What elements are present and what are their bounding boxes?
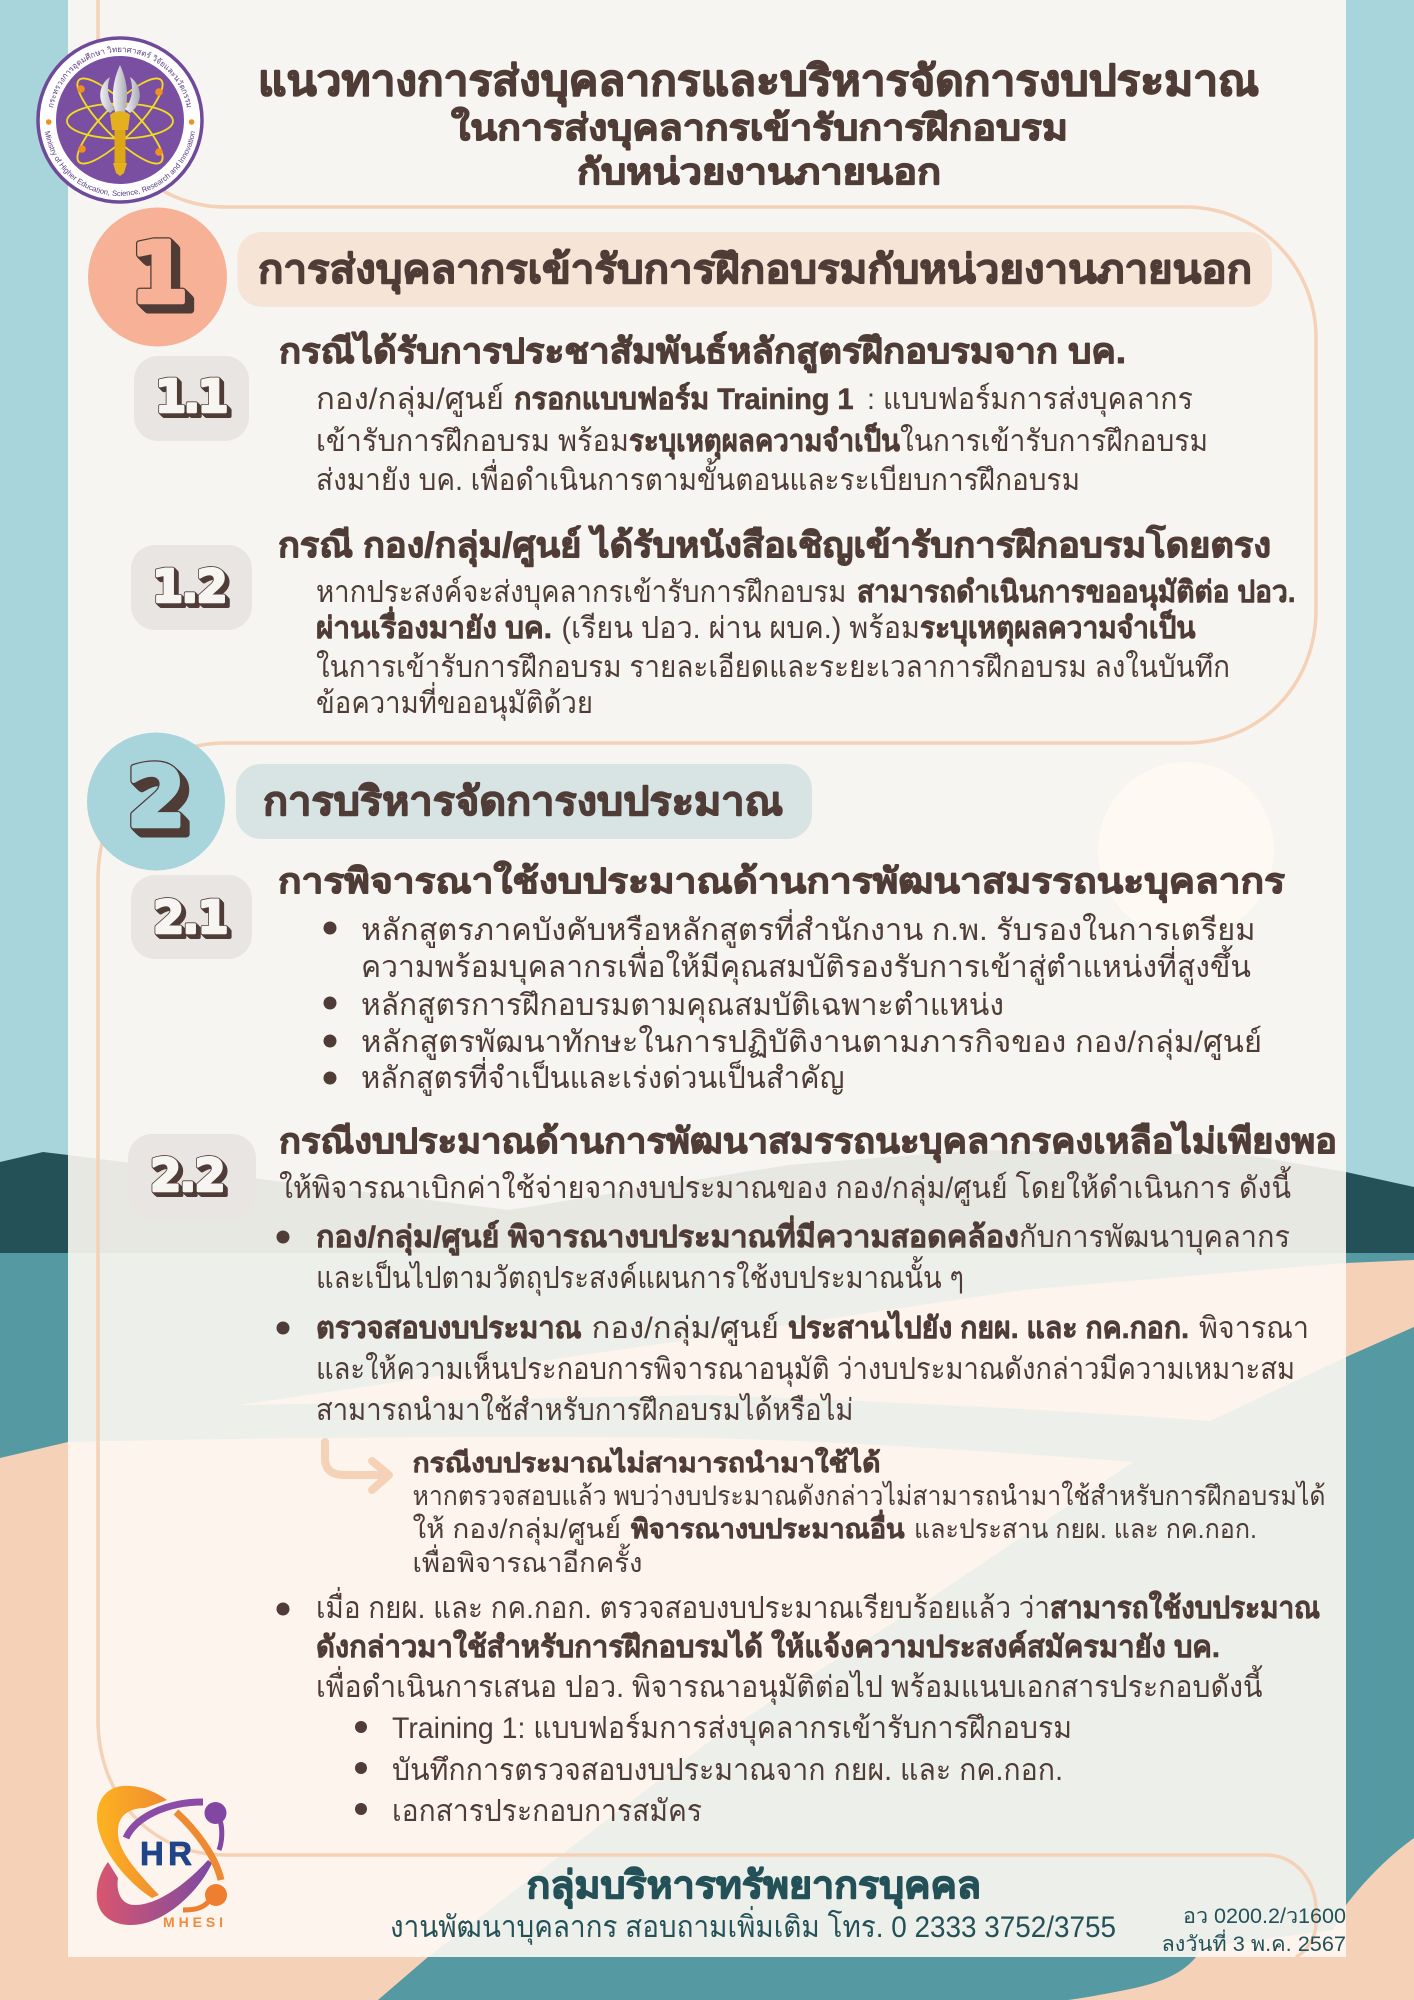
badge 1.1: 1.1	[155, 370, 226, 423]
badge 2.2: 2.2	[150, 1149, 224, 1202]
block 2.2: เพื่อดำเนินการเสนอ ปอว. พิจารณาอนุมัติต่อไป พร้อมแนบเอกสารประกอบดังนี้	[316, 1665, 1262, 1706]
section 2 heading: การบริหารจัดการงบประมาณ	[263, 780, 783, 824]
footer contact: กลุ่มบริหารทรัพยากรบุคคล	[526, 1865, 981, 1909]
block 2.2: และเป็นไปตามวัตถุประสงค์แผนการใช้งบประมาณนั้น ๆ	[316, 1256, 964, 1297]
block 2.2: ตรวจสอบงบประมาณ	[316, 1312, 582, 1345]
logo ring text Thai: กระทรวงการอุดมศึกษา วิทยาศาสตร์ วิจัยและนวัตกรรม	[49, 46, 192, 108]
badge 2.2: 2.2	[150, 1149, 224, 1202]
block 2.1: การพิจารณาใช้งบประมาณด้านการพัฒนาสมรรถนะบุคลากร	[278, 860, 1285, 903]
block 2.1: หลักสูตรการฝึกอบรมตามคุณสมบัติเฉพาะตำแหน่ง	[361, 989, 1004, 1024]
arrow	[325, 1442, 389, 1490]
block 2.2: ประสานไปยัง กยผ. และ กค.กอก.	[788, 1310, 1189, 1345]
block 2.2: เมื่อ กยผ. และ กค.กอก. ตรวจสอบงบประมาณเรียบร้อยแล้ว ว่า	[316, 1587, 1050, 1625]
title: ในการส่งบุคลากรเข้ารับการฝึกอบรม	[451, 106, 1068, 151]
document reference	[1162, 1905, 1346, 1956]
HR MHESI logo	[97, 1786, 227, 1930]
logo wordmark MHESI: MHESI	[163, 1914, 223, 1930]
block 1.2: สามารถดำเนินการขออนุมัติต่อ ปอว.	[857, 576, 1296, 611]
document reference: อว 0200.2/ว1600	[1183, 1905, 1346, 1928]
section 2 number	[87, 732, 225, 870]
section 1 number: 1	[130, 224, 188, 322]
block 2.2: เอกสารประกอบการสมัคร	[392, 1795, 702, 1828]
footer contact	[390, 1865, 1116, 1946]
block 2.1: หลักสูตรพัฒนาทักษะในการปฏิบัติงานตามภารกิจของ กอง/กลุ่ม/ศูนย์	[361, 1025, 1262, 1061]
block 2.2: และให้ความเห็นประกอบการพิจารณาอนุมัติ ว่างบประมาณดังกล่าวมีความเหมาะสม	[316, 1350, 1295, 1388]
badge 2.1	[131, 875, 252, 959]
section 1 number: 1	[130, 224, 188, 322]
block 2.2: ให้พิจารณาเบิกค่าใช้จ่ายจากงบประมาณของ กอง/กลุ่ม/ศูนย์ โดยให้ดำเนินการ ดังนี้	[279, 1166, 1291, 1207]
block 1.1: กอง/กลุ่ม/ศูนย์	[316, 382, 504, 418]
block 2.2: กรณีงบประมาณด้านการพัฒนาสมรรถนะบุคลากรคงเหลือไม่เพียงพอ	[279, 1120, 1337, 1163]
badge 1.2: 1.2	[152, 560, 226, 613]
section 1 heading	[238, 232, 1272, 307]
badge 1.2	[131, 545, 252, 630]
block 1.1: ระบุเหตุผลความจำเป็น	[629, 422, 900, 460]
document reference: ลงวันที่ 3 พ.ค. 2567	[1162, 1929, 1346, 1956]
block 2.2: กอง/กลุ่ม/ศูนย์	[592, 1311, 779, 1347]
block 1.1: กรณีได้รับการประชาสัมพันธ์หลักสูตรฝึกอบรมจาก บค.	[279, 330, 1126, 373]
block 2.2: กอง/กลุ่ม/ศูนย์ พิจารณางบประมาณที่มีความสอดคล้อง	[316, 1215, 1019, 1256]
block 1.2	[278, 524, 1296, 722]
block 2.2: สามารถใช้งบประมาณ	[1050, 1590, 1320, 1625]
badge 1.1	[134, 356, 249, 441]
badge 2.1: 2.1	[153, 891, 227, 944]
block 2.2: กับการพัฒนาบุคลากร	[1019, 1221, 1290, 1256]
block 2.2: สามารถนำมาใช้สำหรับการฝึกอบรมได้หรือไม่	[316, 1392, 854, 1427]
block 2.1: หลักสูตรที่จำเป็นและเร่งด่วนเป็นสำคัญ	[361, 1057, 844, 1096]
ministry logo	[36, 36, 204, 204]
block 2.2: ดังกล่าวมาใช้สำหรับการฝึกอบรมได้ ให้แจ้งความประสงค์สมัครมายัง บค.	[316, 1629, 1220, 1664]
title	[258, 57, 1259, 192]
block 2.2	[276, 1120, 1337, 1828]
badge 1.2: 1.2	[152, 560, 226, 613]
badge 1.1: 1.1	[155, 370, 226, 423]
block 1.2: ระบุเหตุผลความจำเป็น	[920, 609, 1196, 647]
title: กับหน่วยงานภายนอก	[577, 151, 941, 192]
badge 2.2	[128, 1134, 256, 1219]
block 1.2: ผ่านเรื่องมายัง บค.	[316, 606, 552, 645]
block 1.2: หากประสงค์จะส่งบุคลากรเข้ารับการฝึกอบรม	[316, 575, 846, 611]
callout: budget not usable: เพื่อพิจารณาอีกครั้ง	[412, 1543, 642, 1578]
callout: budget not usable: หากตรวจสอบแล้ว พบว่างบประมาณดังกล่าวไม่สามารถนำมาใช้สำหรับการฝึกอบรมได้	[412, 1480, 1326, 1511]
callout: budget not usable: กรณีงบประมาณไม่สามารถนำมาใช้ได้	[412, 1447, 880, 1478]
badge 2.1: 2.1	[153, 891, 227, 944]
logo ring text English: Ministry of Higher Education, Science, Research and Innovation	[44, 131, 195, 196]
block 1.1: เข้ารับการฝึกอบรม พร้อม	[316, 425, 629, 458]
block 1.2: ข้อความที่ขออนุมัติด้วย	[316, 682, 593, 722]
section 2 heading	[236, 764, 812, 839]
block 1.2: ในการเข้ารับการฝึกอบรม รายละเอียดและระยะเวลาการฝึกอบรม ลงในบันทึก	[316, 650, 1230, 684]
logo wordmark HR: HR	[140, 1835, 192, 1872]
block 1.2: (เรียน ปอว. ผ่าน ผบค.) พร้อม	[562, 612, 920, 645]
block 2.1	[278, 860, 1285, 1096]
section 1 heading: การส่งบุคลากรเข้ารับการฝึกอบรมกับหน่วยงานภายนอก	[258, 248, 1252, 295]
block 1.1	[279, 330, 1208, 497]
callout: budget not usable: และประสาน กยผ. และ กค.กอก.	[914, 1514, 1257, 1544]
block 2.2: บันทึกการตรวจสอบงบประมาณจาก กยผ. และ กค.กอก.	[392, 1754, 1063, 1787]
title: แนวทางการส่งบุคลากรและบริหารจัดการงบประมาณ	[258, 57, 1259, 107]
block 1.1: ในการเข้ารับการฝึกอบรม	[900, 424, 1208, 458]
block 2.2: Training 1: แบบฟอร์มการส่งบุคลากรเข้ารับการฝึกอบรม	[392, 1711, 1072, 1747]
section 2 number: 2	[127, 748, 185, 846]
callout: budget not usable	[412, 1447, 1326, 1578]
block 1.1: : แบบฟอร์มการส่งบุคลากร	[867, 382, 1193, 418]
block 2.1: ความพร้อมบุคลากรเพื่อให้มีคุณสมบัติรองรับการเข้าสู่ตำแหน่งที่สูงขึ้น	[361, 945, 1251, 986]
callout: budget not usable: พิจารณางบประมาณอื่น	[631, 1509, 905, 1544]
footer contact: งานพัฒนาบุคลากร สอบถามเพิ่มเติม โทร. 0 2333 3752/3755	[390, 1906, 1116, 1946]
section 1 number	[88, 208, 227, 346]
block 2.2: พิจารณา	[1199, 1312, 1309, 1345]
block 1.1: กรอกแบบฟอร์ม Training 1	[514, 382, 854, 416]
callout: budget not usable: ให้ กอง/กลุ่ม/ศูนย์	[412, 1513, 621, 1546]
block 1.1: ส่งมายัง บค. เพื่อดำเนินการตามขั้นตอนและระเบียบการฝึกอบรม	[316, 458, 1080, 497]
block 2.1: หลักสูตรภาคบังคับหรือหลักสูตรที่สำนักงาน ก.พ. รับรองในการเตรียม	[361, 909, 1256, 948]
section 2 number: 2	[127, 748, 185, 846]
block 1.2: กรณี กอง/กลุ่ม/ศูนย์ ได้รับหนังสือเชิญเข้ารับการฝึกอบรมโดยตรง	[278, 524, 1271, 567]
